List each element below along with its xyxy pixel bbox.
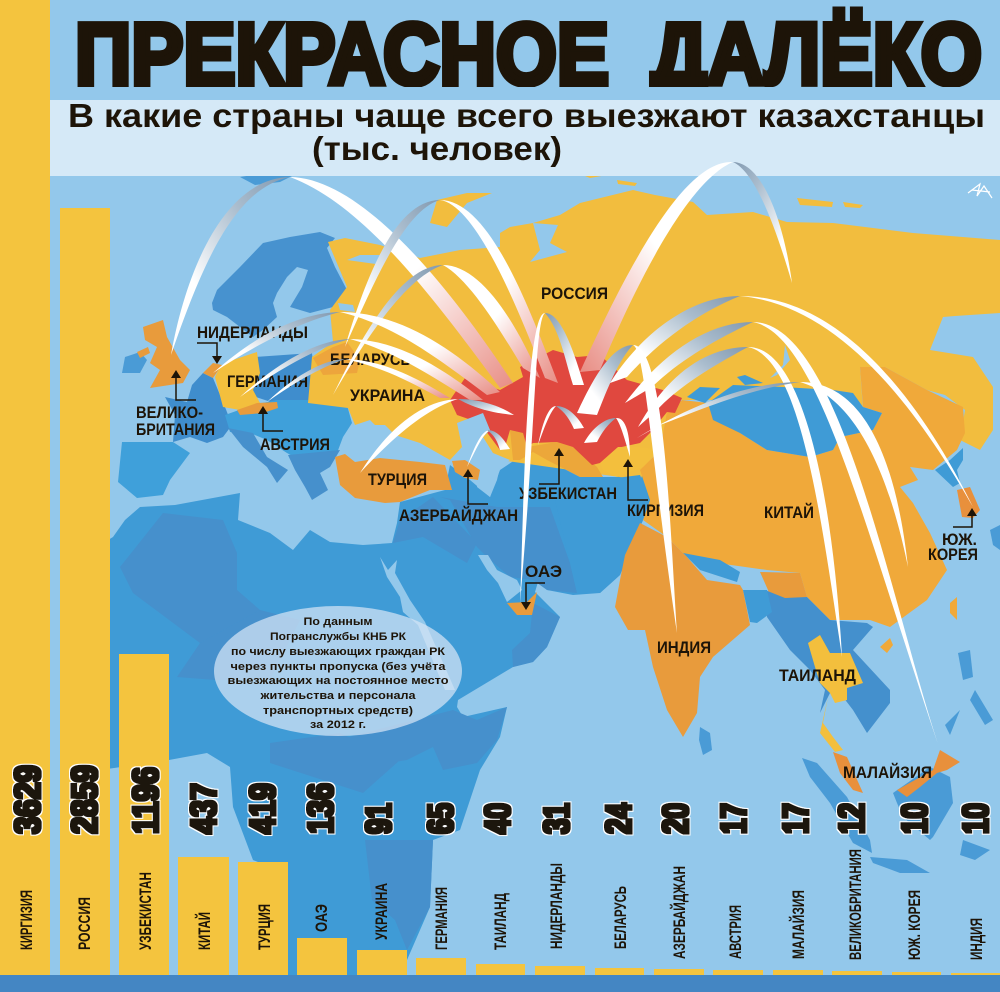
map: Korea north bbox=[935, 448, 963, 487]
bar names: РОССИЯ bbox=[75, 897, 94, 950]
label: Great Britain: ВЕЛИКО- bbox=[136, 403, 203, 422]
label: Austria: АВСТРИЯ bbox=[260, 435, 330, 454]
bar values: 3629 bbox=[7, 765, 48, 834]
map: France bbox=[165, 373, 232, 443]
arc: to UAE bbox=[520, 313, 584, 603]
subtitle: В какие страны чаще всего выезжают казахстанцы bbox=[68, 97, 985, 134]
label: Uzbekistan: УЗБЕКИСТАН bbox=[519, 484, 617, 503]
bar values bbox=[7, 765, 996, 834]
label: China: КИТАЙ bbox=[764, 503, 814, 522]
map: Netherlands bbox=[203, 363, 222, 378]
bar names: АВСТРИЯ bbox=[726, 905, 745, 959]
bar names: ТАИЛАНД bbox=[491, 893, 510, 950]
label: Malaysia: МАЛАЙЗИЯ bbox=[843, 763, 932, 782]
bar names: ИНДИЯ bbox=[967, 918, 986, 960]
map: Poland bbox=[250, 353, 315, 405]
subtitle bbox=[68, 97, 985, 167]
arc: to Kirgizia bbox=[584, 418, 630, 457]
arrow: UAE bbox=[521, 583, 545, 610]
arc: to China bbox=[637, 382, 908, 567]
map: Germany bbox=[215, 352, 260, 410]
arc: to Austria bbox=[267, 359, 450, 402]
map: Black Sea bbox=[340, 427, 440, 462]
label: Azerbaijan: АЗЕРБАЙДЖАН bbox=[399, 506, 518, 525]
bar names: КИРГИЗИЯ bbox=[17, 890, 36, 950]
note text bbox=[228, 616, 449, 731]
note text: через пункты пропуска (без учёта bbox=[230, 661, 447, 673]
bar values: 437 bbox=[183, 783, 224, 834]
map: Lake Baikal bbox=[770, 345, 790, 378]
arrow: Netherlands bbox=[197, 343, 222, 364]
bar values: 65 bbox=[420, 803, 461, 834]
map: Java bbox=[870, 857, 930, 873]
label: South Korea: ЮЖ. bbox=[942, 530, 977, 549]
title: ПРЕКРАСНОЕ bbox=[75, 6, 609, 103]
map: Scandinavia and Finland bbox=[212, 232, 347, 337]
arc: to Russia bbox=[580, 162, 792, 372]
bar values: 1196 bbox=[125, 767, 166, 834]
subtitle band bbox=[50, 100, 1000, 176]
world map bbox=[100, 172, 1000, 975]
map: Thai peninsula bbox=[820, 697, 843, 752]
bar names: МАЛАЙЗИЯ bbox=[789, 890, 808, 959]
arc: to Turkey bbox=[360, 399, 514, 473]
map: China bbox=[640, 367, 965, 627]
bar values: 31 bbox=[536, 803, 577, 834]
map: Mongolia bbox=[708, 385, 882, 457]
map: Kirgizia bbox=[600, 447, 660, 477]
map: Sumatra bbox=[802, 758, 872, 853]
arc: to Thailand bbox=[638, 347, 842, 657]
arc: to South Korea bbox=[610, 296, 973, 507]
bar values: 12 bbox=[831, 803, 872, 834]
map: Persian Gulf bbox=[478, 555, 522, 602]
bar names: ГЕРМАНИЯ bbox=[432, 887, 451, 950]
arrow: Azerbaijan bbox=[463, 469, 488, 504]
map: Azerbaijan bbox=[452, 460, 480, 480]
label: India: ИНДИЯ bbox=[657, 638, 711, 657]
bar names: ТУРЦИЯ bbox=[255, 904, 274, 950]
map: Central Africa bbox=[270, 733, 400, 793]
bar names: УКРАИНА bbox=[372, 883, 391, 940]
map: Ireland bbox=[122, 352, 147, 373]
note text: выезжающих на постоянное место bbox=[228, 675, 449, 687]
bar names bbox=[17, 849, 986, 960]
bar names: ВЕЛИКОБРИТАНИЯ bbox=[846, 849, 865, 960]
map: White Sea bbox=[347, 255, 387, 265]
note text: жительства и персонала bbox=[259, 690, 417, 702]
map: South Africa lower bbox=[365, 840, 433, 950]
bar values: 136 bbox=[300, 783, 341, 834]
map: Hainan and Taiwan bbox=[880, 597, 957, 653]
callout arrows bbox=[171, 343, 977, 610]
subtitle: (тыс. человек) bbox=[312, 130, 562, 167]
map: Austria bbox=[237, 402, 278, 415]
map: Borneo bbox=[893, 767, 953, 840]
note ellipse bbox=[214, 606, 462, 736]
map: Afghanistan and Pakistan bbox=[555, 475, 650, 593]
arc: to Great Britain bbox=[171, 177, 513, 388]
label: Thailand: ТАИЛАНД bbox=[779, 666, 856, 685]
map: artist logo bbox=[968, 184, 992, 198]
map: Philippines and eastern islands bbox=[945, 650, 993, 860]
arc: to Germany bbox=[240, 339, 483, 400]
label: Russia: РОССИЯ bbox=[541, 284, 608, 303]
map: Japan bbox=[990, 525, 1000, 550]
label: Netherlands: НИДЕРЛАНДЫ bbox=[197, 323, 308, 342]
map: Thailand bbox=[808, 635, 863, 703]
note text: По данным bbox=[304, 616, 372, 628]
map: Svalbard bbox=[240, 172, 300, 185]
bar names: ЮЖ. КОРЕЯ bbox=[905, 890, 924, 960]
bar names: ОАЭ bbox=[312, 904, 331, 932]
map: Malay peninsula bbox=[833, 752, 863, 793]
map: Spain bbox=[118, 442, 190, 498]
map: Central and South-East Europe bbox=[225, 400, 352, 460]
map: Sudan region bbox=[177, 610, 300, 680]
label: South Korea bbox=[928, 530, 978, 564]
bar values: 17 bbox=[713, 803, 754, 834]
map: Turkey bbox=[335, 454, 452, 503]
bar values: 20 bbox=[655, 803, 696, 834]
map: Bangladesh bbox=[743, 590, 772, 623]
bar values: 10 bbox=[955, 803, 996, 834]
map: Italy bbox=[228, 428, 288, 483]
map: Africa, Arabia and Middle East base bbox=[100, 452, 650, 975]
arc: to Belarus bbox=[345, 200, 558, 383]
note text: по числу выезжающих граждан РК bbox=[231, 646, 445, 658]
map: Oman bbox=[512, 603, 560, 667]
map: North-West Africa bbox=[120, 513, 260, 643]
label: Turkey: ТУРЦИЯ bbox=[368, 470, 427, 489]
label: Germany: ГЕРМАНИЯ bbox=[227, 372, 308, 391]
map: Gulf of Ob bbox=[530, 223, 567, 262]
map: Nepal bbox=[683, 553, 740, 582]
title bbox=[78, 6, 982, 87]
label: Kirgizia: КИРГИЗИЯ bbox=[627, 501, 704, 520]
bar values: 2859 bbox=[64, 765, 105, 834]
map: South Korea bbox=[957, 487, 980, 518]
bottom strip bbox=[0, 975, 1000, 992]
map: Iran bbox=[440, 497, 577, 593]
map: Syria and Iraq bbox=[393, 497, 477, 563]
map: Great Britain bbox=[143, 320, 190, 388]
map: Belarus bbox=[313, 342, 360, 375]
map: Indochina and Myanmar bbox=[765, 590, 890, 733]
arrow: Austria bbox=[258, 406, 283, 431]
bar names: КИТАЙ bbox=[195, 912, 214, 950]
note text: транспортных средств) bbox=[263, 705, 413, 717]
bar names: НИДЕРЛАНДЫ bbox=[547, 863, 566, 949]
arc: to Malaysia bbox=[625, 322, 940, 750]
map labels bbox=[136, 284, 978, 782]
bar names: АЗЕРБАЙДЖАН bbox=[670, 866, 689, 959]
label: Belarus: БЕЛАРУСЬ bbox=[330, 350, 411, 369]
arrow: Kirgizia bbox=[623, 459, 648, 500]
bar values: 40 bbox=[477, 803, 518, 834]
map: Northern Ireland bbox=[137, 347, 150, 358]
map: Kazakhstan bbox=[450, 350, 682, 465]
bar names: УЗБЕКИСТАН bbox=[136, 872, 155, 950]
arrow: Uzbekistan bbox=[539, 448, 564, 484]
map: Balkans and Greece bbox=[288, 450, 340, 500]
map: North-East India bbox=[760, 572, 807, 620]
label: Great Britain: БРИТАНИЯ bbox=[136, 420, 215, 439]
map: Russia and Ukraine bbox=[308, 190, 1000, 480]
map: Sri Lanka bbox=[699, 727, 712, 755]
arc: to Azerbaijan bbox=[467, 430, 510, 467]
bar values: 17 bbox=[775, 803, 816, 834]
map: Arctic islands bbox=[575, 172, 863, 208]
map: Altai fragments bbox=[687, 375, 763, 403]
map: Gulf of Finland bbox=[338, 303, 355, 312]
map: Red Sea bbox=[380, 557, 455, 690]
label: UAE: ОАЭ bbox=[525, 562, 562, 581]
map: Central Asia Turkmenistan and Uzbekistan bbox=[510, 430, 603, 477]
map: Novaya Zemlya bbox=[430, 193, 492, 227]
map: UAE bbox=[507, 592, 537, 615]
arc: to India bbox=[577, 345, 677, 633]
label: South Korea: КОРЕЯ bbox=[928, 545, 978, 564]
bar values: 419 bbox=[242, 783, 283, 834]
map: Horn of Africa bbox=[337, 707, 507, 770]
bar names: БЕЛАРУСЬ bbox=[611, 886, 630, 949]
map: Caspian Sea bbox=[457, 413, 510, 497]
note text: Погранслужбы КНБ РК bbox=[270, 631, 406, 643]
bar values: 91 bbox=[358, 803, 399, 834]
note text: за 2012 г. bbox=[310, 719, 366, 731]
arc: to Uzbekistan bbox=[538, 406, 584, 445]
bar values: 24 bbox=[598, 803, 639, 834]
arc: to Ukraine bbox=[333, 265, 540, 395]
map: India bbox=[615, 523, 750, 737]
label: Ukraine: УКРАИНА bbox=[350, 386, 425, 405]
flow arcs bbox=[171, 162, 973, 750]
bar values: 10 bbox=[894, 803, 935, 834]
arc: to Netherlands bbox=[213, 312, 500, 395]
arrow: South Korea bbox=[953, 508, 977, 527]
arrow: Great Britain bbox=[171, 370, 196, 400]
map: East Malaysia bbox=[897, 750, 960, 797]
label: Great Britain bbox=[136, 403, 215, 439]
